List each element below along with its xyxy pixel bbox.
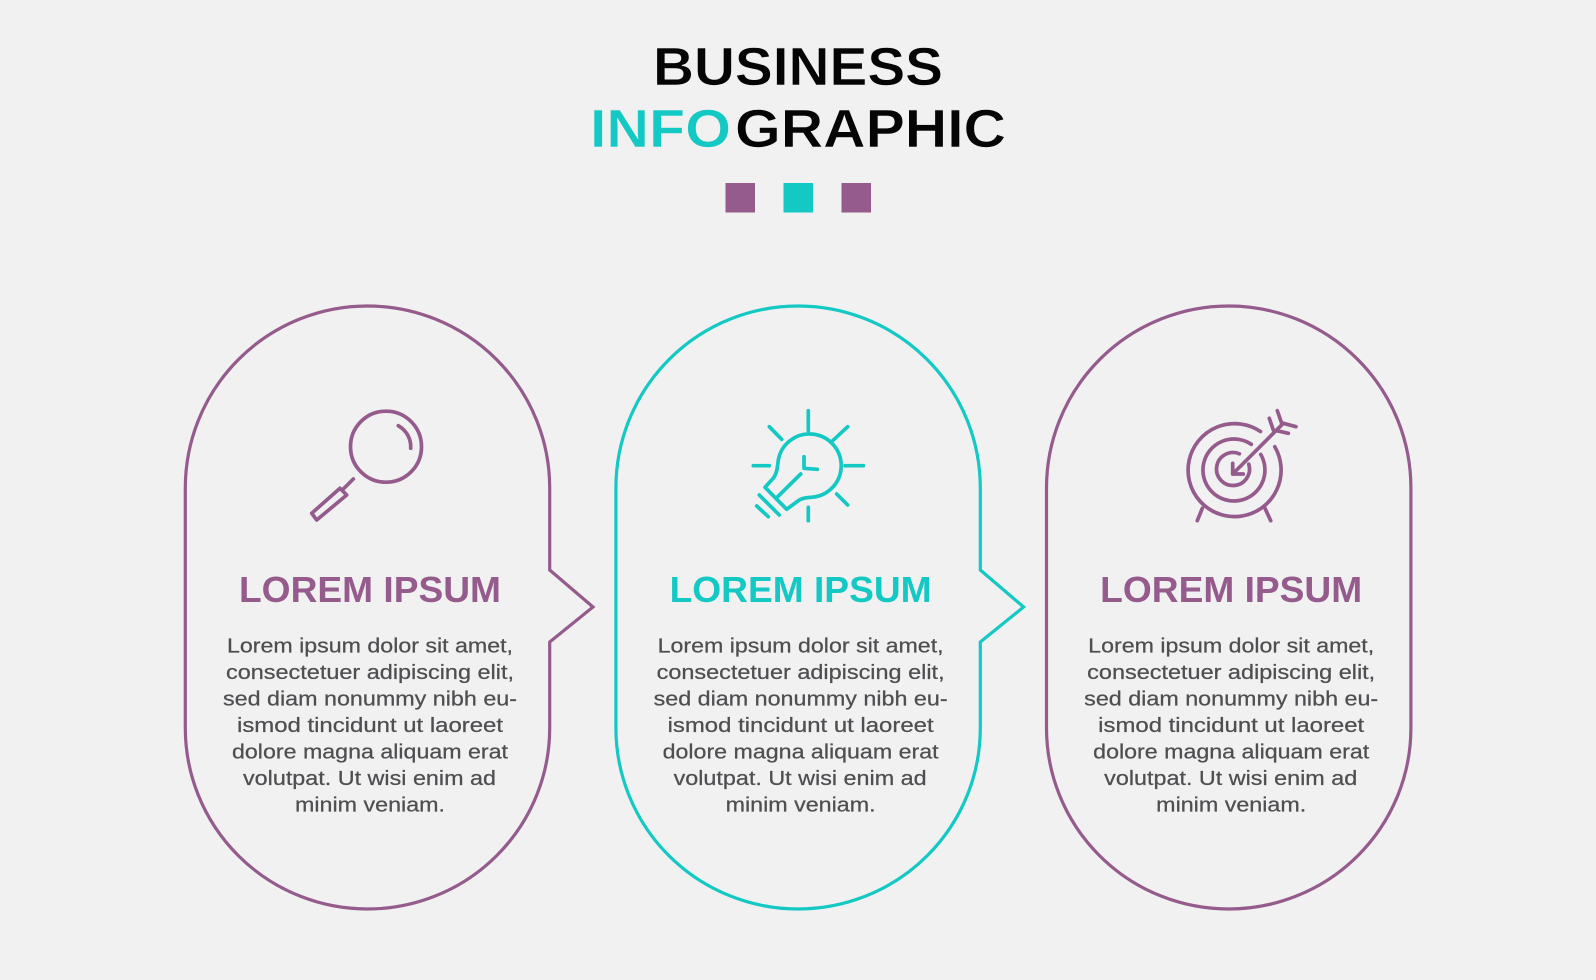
text block 3: minim veniam.: [1156, 795, 1306, 817]
text block 3: dolore magna aliquam erat: [1093, 742, 1370, 764]
text block 1: ismod tincidunt ut laoreet: [237, 715, 504, 737]
text block 3: [1084, 636, 1378, 817]
heading 1: LOREM IPSUM: [239, 569, 501, 610]
icon: magnifying glass: [312, 411, 422, 520]
text block 2: Lorem ipsum dolor sit amet,: [658, 636, 944, 658]
text block 2: minim veniam.: [726, 795, 876, 817]
title: [590, 37, 1006, 159]
panel: step 1: [185, 306, 593, 909]
title: GRAPHIC: [735, 99, 1006, 159]
panel outline 1: [185, 306, 593, 909]
text block 3: sed diam nonummy nibh eu-: [1084, 688, 1378, 710]
panel: step 2: [616, 306, 1024, 909]
heading 2: LOREM IPSUM: [670, 569, 932, 610]
text block 1: minim veniam.: [295, 795, 445, 817]
text block 3: Lorem ipsum dolor sit amet,: [1088, 636, 1374, 658]
panel outline 2: [616, 306, 1024, 909]
icon: target with arrow: [1188, 411, 1296, 521]
text block 1: consectetuer adipiscing elit,: [226, 662, 514, 684]
text block 3: ismod tincidunt ut laoreet: [1098, 715, 1365, 737]
title: INFO: [590, 99, 731, 159]
heading 3: LOREM IPSUM: [1100, 569, 1362, 610]
icon: light bulb with clock: [753, 411, 863, 521]
text block 2: volutpat. Ut wisi enim ad: [674, 768, 927, 790]
panel: step 3: [1046, 306, 1411, 909]
title: BUSINESS: [653, 37, 943, 97]
text block 2: dolore magna aliquam erat: [663, 742, 939, 764]
text block 3: consectetuer adipiscing elit,: [1087, 662, 1375, 684]
text block 1: dolore magna aliquam erat: [232, 742, 509, 764]
text block 2: [654, 636, 948, 817]
text block 1: sed diam nonummy nibh eu-: [223, 688, 517, 710]
text block 1: Lorem ipsum dolor sit amet,: [227, 636, 513, 658]
text block 2: sed diam nonummy nibh eu-: [654, 688, 948, 710]
text block 3: volutpat. Ut wisi enim ad: [1104, 768, 1357, 790]
text block 2: ismod tincidunt ut laoreet: [668, 715, 934, 737]
title marker squares: [726, 183, 871, 212]
panel outline 3: [1046, 306, 1411, 909]
text block 2: consectetuer adipiscing elit,: [657, 662, 945, 684]
text block 1: [223, 636, 517, 817]
text block 1: volutpat. Ut wisi enim ad: [243, 768, 496, 790]
